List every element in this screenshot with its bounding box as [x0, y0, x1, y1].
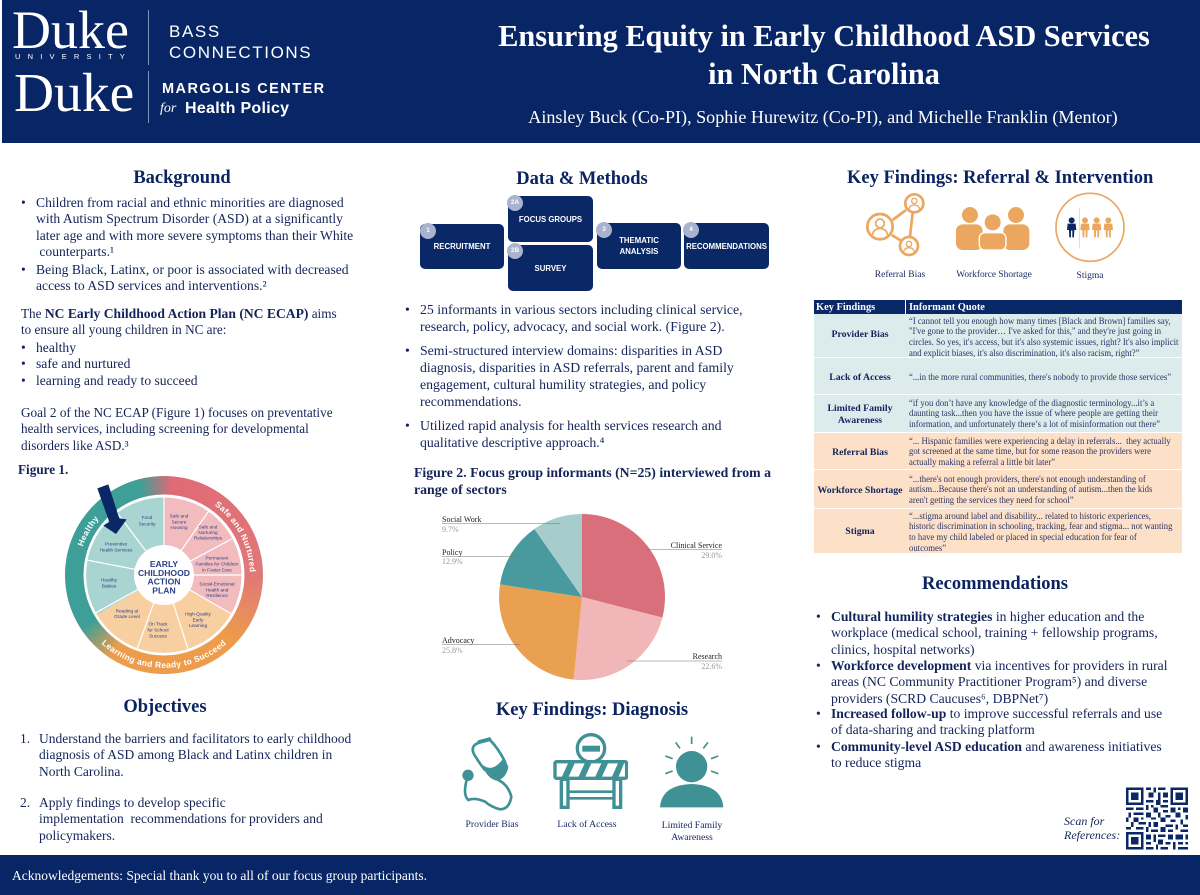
row: referral bias: got screened at the same time, but for some reason the providers were — [909, 447, 1151, 457]
figure label: figure 1: Figure 1. — [18, 462, 68, 477]
arrow: points to preventive health services — [97, 484, 127, 534]
text block: background bullet 1: later age and with more severe symptoms than their White — [36, 228, 353, 243]
text block: background bullet 1 — [36, 195, 356, 260]
logo: Duke University Bass Connections: BASS — [169, 22, 221, 41]
figure 1: early childhood action plan wheel: Food — [142, 515, 153, 520]
figure 1: early childhood action plan wheel: Babies — [102, 584, 117, 588]
row: limited family awareness: information, and unfortunately there’s a lot of misinformation out there” — [909, 420, 1160, 430]
text block: methods bullet 2: Semi-structured interview domains: disparities in ASD — [420, 342, 722, 358]
row: referral bias: actually making a referral a little bit later” — [909, 458, 1055, 468]
text block: recommendation 2: areas (NC Community Practitioner Program⁵) and diverse — [831, 674, 1147, 689]
footer: acknowledgements: Acknowledgements: Special thank you to all of our focus group participants. — [12, 868, 427, 883]
step 4: recommendations — [684, 223, 769, 269]
title: in North Carolina — [708, 57, 940, 91]
heading: key findings referral and intervention: Key Findings: Referral & Intervention — [847, 168, 1153, 188]
text block: methods bullet 2 — [420, 342, 760, 410]
text block: methods bullet 2: engagement, cultural humility strategies, and policy — [420, 376, 706, 392]
pie chart: focus group informants by sector: Policy — [442, 548, 462, 557]
icon: stethoscope — [462, 737, 513, 811]
QR code — [1126, 788, 1188, 850]
row: referral bias — [814, 433, 1182, 469]
pie chart: focus group informants by sector: Advocacy — [442, 636, 474, 645]
row: workforce shortage: aren't getting the services they need for school” — [909, 496, 1074, 506]
text block: NC ECAP intro — [21, 306, 337, 337]
icon: stigma circle with figures — [1055, 192, 1125, 262]
row: limited family awareness: Awareness — [838, 415, 882, 426]
row: stigma — [814, 509, 1182, 553]
step 3: thematic analysis: ANALYSIS — [620, 247, 658, 256]
step 1: recruitment: RECRUITMENT — [434, 242, 490, 251]
text block: recommendation 4: Community-level ASD education and awareness initiatives — [831, 739, 1162, 754]
table header: Informant Quote — [909, 302, 985, 313]
step 2B: survey: 2B — [511, 247, 519, 254]
row: referral bias: Referral Bias — [832, 447, 888, 458]
figure 1: early childhood action plan wheel: Preventive — [105, 542, 127, 546]
text block: NC ECAP intro: The NC Early Childhood Action Plan (NC ECAP) aims — [21, 306, 337, 321]
figure 1: early childhood action plan wheel: PLAN — [152, 586, 176, 596]
text block: recommendation 2: providers (SCRD Caucuses⁶, DBPNet⁷) — [831, 691, 1048, 706]
text block: methods bullet 1: 25 informants in various sectors including clinical service, — [420, 302, 743, 316]
row: limited family awareness: Limited Family — [827, 403, 893, 414]
figure 1: early childhood action plan wheel: Learning and Ready to Succeed — [102, 640, 226, 669]
list: NC ECAP aims: healthy — [36, 340, 76, 354]
figure 1: early childhood action plan wheel: Safe and — [199, 524, 218, 530]
list: NC ECAP aims — [22, 340, 198, 388]
text block: goal 2 — [21, 405, 333, 453]
label: limited family awareness — [662, 820, 722, 842]
icon: person with rays — [660, 736, 724, 808]
figure 1: early childhood action plan wheel: On Track — [148, 622, 168, 626]
text block: recommendation 2 — [831, 658, 1176, 707]
text block: objective 1: North Carolina. — [39, 764, 124, 779]
pie chart: focus group informants by sector: 22.6% — [701, 662, 722, 671]
text block: background bullet 1: Children from racial and ethnic minorities are diagnosed — [36, 195, 344, 210]
figure 1: early childhood action plan wheel: EARLY — [150, 559, 178, 569]
text block: background bullet 2: access to ASD services and interventions.² — [36, 278, 267, 293]
text block: background bullet 2: Being Black, Latinx, or poor is associated with decreased — [36, 262, 349, 277]
figure 1: early childhood action plan wheel: High-Quality — [185, 612, 212, 616]
text block: recommendation 1: workplace (medical school, training + fellowship programs, — [831, 625, 1158, 640]
text block: objective 2 — [20, 795, 323, 843]
text block: objective 1: Understand the barriers and facilitators to early childhood — [39, 731, 351, 746]
pie chart: focus group informants by sector — [442, 514, 722, 680]
text block: methods bullet 2: recommendations. — [420, 394, 522, 408]
figure 1: early childhood action plan wheel: Permanent — [206, 556, 229, 560]
logo: Duke Margolis Center for Health Policy: Duke — [14, 63, 134, 124]
text block: methods bullet 1 — [420, 300, 760, 334]
figure 1: early childhood action plan wheel: Success — [149, 634, 168, 638]
pie chart: focus group informants by sector: Social Work — [442, 515, 481, 524]
footer: acknowledgements — [0, 855, 1200, 895]
figure 1: early childhood action plan wheel: Health Services — [100, 548, 133, 552]
text block: objective 1 — [20, 731, 352, 779]
heading: recommendations: Recommendations — [922, 574, 1068, 594]
step 1: recruitment — [420, 224, 504, 269]
text block: NC ECAP intro: to ensure all young children in NC are: — [21, 322, 226, 337]
text block: recommendation 3 — [831, 706, 1176, 739]
heading: data and methods: Data & Methods — [516, 169, 648, 189]
figure 1: early childhood action plan wheel: Early — [193, 618, 204, 622]
row: stigma: “...stigma around label and disability... related to historic experiences, — [909, 512, 1151, 522]
row: provider bias: “I cannot tell you enough how many times [Black and Brown] families say, — [909, 317, 1171, 327]
text block: methods bullet 1: research, policy, advocacy, and social work. (Figure 2). — [420, 318, 725, 334]
step 3: thematic analysis — [597, 223, 681, 269]
label: limited family awareness: Awareness — [671, 832, 713, 842]
label: stigma: Stigma — [1077, 271, 1103, 281]
figure 1: early childhood action plan wheel: in Foster Care — [202, 568, 232, 572]
row: provider bias: circles. So yes, it's access, but it's also systemic issues, right? It's also implicit — [909, 338, 1178, 348]
figure 1: early childhood action plan wheel: ACTION — [148, 576, 180, 586]
figure 2 caption: Figure 2. Focus group informants (N=25) interviewed from a — [414, 465, 771, 480]
process diagram: data and methods steps — [420, 195, 769, 291]
heading: objectives: Objectives — [123, 697, 207, 717]
figure 2 caption — [414, 465, 771, 497]
label: workforce shortage: Workforce Shortage — [956, 270, 1032, 280]
pie chart: focus group informants by sector: Clinical Service — [671, 541, 722, 550]
row: stigma: to have my child labeled or placed in special education for fear of — [909, 533, 1137, 543]
text block: goal 2: health services, including screening for developmental — [21, 421, 309, 436]
table: key findings and informant quotes — [814, 300, 1182, 554]
row: limited family awareness — [814, 395, 1182, 432]
figure 1: early childhood action plan wheel: Families for Children — [196, 562, 239, 566]
figure 1: early childhood action plan wheel: Relationships — [194, 536, 223, 540]
row: provider bias — [814, 314, 1182, 357]
row: stigma: Stigma — [845, 526, 875, 537]
list: NC ECAP aims: learning and ready to succeed — [36, 372, 198, 388]
figure 1: early childhood action plan wheel: Secure — [172, 520, 187, 524]
row: provider bias: Provider Bias — [831, 329, 889, 340]
step 3: thematic analysis: 3 — [602, 226, 606, 233]
logo: Duke University Bass Connections — [12, 0, 312, 65]
row: referral bias: “... Hispanic families were experiencing a delay in referrals... they actually — [909, 437, 1171, 447]
label: lack of access: Lack of Access — [557, 818, 617, 830]
step 4: recommendations: RECOMMENDATIONS — [686, 242, 767, 250]
text block: recommendation 3: Increased follow-up to improve successful referrals and use — [831, 706, 1162, 721]
title — [498, 19, 1150, 91]
QR caption: Scan for — [1064, 814, 1104, 828]
row: stigma: outcomes” — [909, 544, 946, 554]
pie chart: focus group informants by sector: 29.0% — [701, 551, 722, 560]
step 3: thematic analysis: THEMATIC — [619, 236, 659, 245]
figure 1: early childhood action plan wheel: Housing — [170, 525, 188, 530]
text block: recommendation 1: clinics, hospital networks) — [831, 642, 975, 657]
text block: objective 2: implementation recommendations for providers and — [39, 811, 323, 826]
logo: Duke University Bass Connections: CONNECTIONS — [169, 42, 312, 62]
row: stigma: historic discrimination in schooling, tracking, fear and stigma... not wanting — [909, 522, 1172, 532]
label: referral bias: Referral Bias — [875, 270, 925, 280]
QR caption: References: — [1064, 828, 1120, 842]
pie chart: focus group informants by sector: 25.8% — [442, 646, 463, 655]
row: limited family awareness: “if you don’t have any knowledge of the diagnostic terminology...it’s a — [909, 399, 1154, 409]
row: lack of access — [814, 358, 1182, 394]
QR caption — [1064, 814, 1120, 842]
logo: Duke Margolis Center for Health Policy: for — [160, 101, 176, 116]
figure 1: early childhood action plan wheel: Safe and — [170, 514, 189, 518]
step 2B: survey: SURVEY — [535, 264, 566, 272]
step 2A: focus groups: 2A — [511, 199, 519, 206]
row: workforce shortage: autism...Because there's not an understanding of autism...then the kids — [909, 485, 1152, 495]
row: workforce shortage: “...there's not enough providers, there's not enough understanding of — [909, 475, 1146, 485]
figure 1: early childhood action plan wheel: Healthy — [101, 578, 118, 582]
step 2B: survey — [508, 245, 593, 291]
text block: objective 2: policymakers. — [39, 828, 115, 843]
figure 1: early childhood action plan wheel: CHILDHOOD — [138, 568, 190, 578]
figure 1: early childhood action plan wheel: for School — [147, 628, 169, 632]
figure 1: early childhood action plan wheel: Grade Level — [114, 614, 140, 619]
row: limited family awareness: daunting task...then you have the issue of where people are getting their — [909, 409, 1158, 419]
text block: background bullet 2 — [36, 262, 356, 295]
figure 1: early childhood action plan wheel: Health and — [206, 588, 229, 592]
text block: recommendation 3: of data-sharing and tracking platform — [831, 722, 1035, 737]
text block: recommendation 1: Cultural humility strategies in higher education and the — [831, 609, 1144, 624]
icon: road barrier — [553, 733, 628, 809]
table header — [814, 300, 1182, 314]
heading: background: Background — [133, 168, 231, 188]
text block: methods bullet 3: qualitative descriptive approach.⁴ — [420, 435, 604, 450]
row: workforce shortage — [814, 470, 1182, 508]
row: lack of access: Lack of Access — [829, 372, 891, 383]
figure 1: early childhood action plan wheel: Learning — [189, 623, 208, 628]
pie chart: focus group informants by sector: Research — [693, 652, 722, 661]
text block: methods bullet 3 — [420, 417, 760, 451]
pie chart: focus group informants by sector: 9.7% — [442, 525, 459, 534]
figure 1: early childhood action plan wheel: Safe and Nurtured — [215, 502, 256, 572]
figure 1: early childhood action plan wheel: Security — [139, 522, 156, 526]
logo: Duke University Bass Connections: UNIVERSITY — [15, 52, 132, 61]
text block: background bullet 1: counterparts.¹ — [39, 244, 114, 259]
figure 1: early childhood action plan wheel: Reading at — [116, 608, 139, 614]
text block: recommendation 1 — [831, 609, 1176, 658]
logo: Duke Margolis Center for Health Policy: Health Policy — [185, 100, 289, 117]
text block: methods bullet 2: diagnosis, disparities in ASD referrals, parent and family — [420, 360, 734, 374]
text block: methods bullet 3: Utilized rapid analysis for health services research and — [420, 418, 722, 433]
figure 1: early childhood action plan wheel: Healthy — [78, 516, 98, 546]
title: Ensuring Equity in Early Childhood ASD Services — [498, 19, 1150, 53]
row: workforce shortage: Workforce Shortage — [818, 485, 902, 496]
authors: Ainsley Buck (Co-PI), Sophie Hurewitz (Co-PI), and Michelle Franklin (Mentor) — [528, 107, 1118, 127]
logo: Duke Margolis Center for Health Policy — [14, 63, 326, 124]
icon: workforce group — [956, 207, 1030, 250]
figure 1: early childhood action plan wheel: Nurturing — [198, 530, 218, 535]
text block: recommendation 2: Workforce development via incentives for providers in rural — [831, 658, 1168, 673]
pie chart: focus group informants by sector: 12.9% — [442, 557, 463, 566]
step 4: recommendations: 4 — [689, 226, 693, 233]
figure 2 caption: range of sectors — [414, 482, 507, 497]
label: provider bias: Provider Bias — [465, 818, 518, 830]
logo: Duke Margolis Center for Health Policy: MARGOLIS CENTER — [162, 81, 326, 97]
text block: objective 2: Apply findings to develop specific — [39, 795, 226, 810]
text block: recommendation 4 — [831, 739, 1176, 772]
logo: Duke University Bass Connections: Duke — [12, 0, 129, 60]
step 2A: focus groups — [508, 196, 593, 242]
text block: goal 2: Goal 2 of the NC ECAP (Figure 1) focuses on preventative — [21, 405, 333, 420]
figure 1: early childhood action plan wheel: Social-Emotional — [199, 582, 235, 586]
row: provider bias: and explicit biases, it's also discrimination, it's also racism, right?” — [909, 349, 1139, 359]
step 1: recruitment: 1 — [426, 227, 430, 234]
heading: key findings diagnosis: Key Findings: Diagnosis — [496, 700, 688, 720]
text block: recommendation 4: to reduce stigma — [831, 755, 921, 770]
table header: Key Findings — [816, 302, 875, 313]
step 2A: focus groups: FOCUS GROUPS — [519, 214, 582, 224]
figure 1: early childhood action plan wheel: Resilience — [206, 593, 228, 598]
icon: referral network — [866, 193, 925, 256]
label: limited family awareness: Limited Family — [662, 820, 722, 830]
figure 1: early childhood action plan wheel — [65, 476, 263, 674]
list: NC ECAP aims: safe and nurtured — [36, 356, 130, 371]
row: provider bias: "I've gone to the provider… I've asked for this," and they're just going in — [909, 327, 1161, 337]
header banner — [2, 0, 1200, 143]
text: 1. — [20, 731, 30, 746]
text: 2. — [20, 795, 30, 810]
text block: background bullet 1: with Autism Spectrum Disorder (ASD) at a significantly — [36, 211, 343, 226]
row: lack of access: “...in the more rural communities, there's nobody to provide those services” — [909, 373, 1171, 383]
text block: objective 1: diagnosis of ASD among Black and Latinx children in — [39, 747, 332, 762]
text block: goal 2: disorders like ASD.³ — [21, 438, 129, 453]
